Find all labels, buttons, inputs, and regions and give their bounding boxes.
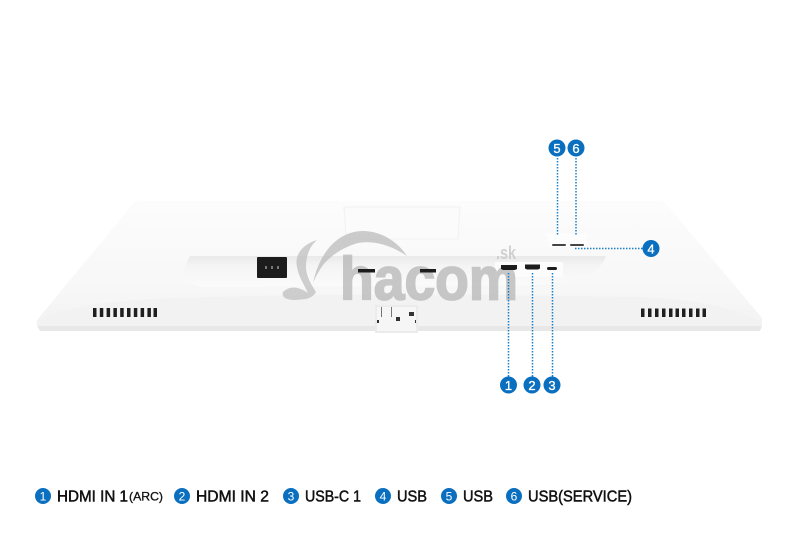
callout 4: 4: [647, 242, 655, 256]
legend item 6: 6: [511, 490, 518, 504]
stand mount recess: [182, 256, 606, 287]
legend item 3: [283, 488, 361, 506]
watermark: hacom.sk: hacom: [340, 246, 518, 312]
legend item 5: [441, 488, 493, 506]
callout 5: 5: [553, 141, 561, 156]
HDMI and USB-C ports: [501, 264, 557, 270]
callout 1: [500, 273, 517, 394]
monitor body: [37, 201, 762, 331]
legend item 1: 1: [40, 490, 47, 504]
power socket: [257, 257, 287, 278]
callout 5: [548, 140, 566, 236]
callout 6: 6: [572, 141, 580, 156]
legend item 4: 4: [380, 490, 387, 504]
callout 6: [568, 140, 584, 236]
legend item 4: USB: [397, 488, 427, 506]
legend item 1: [35, 488, 163, 506]
legend: [35, 488, 632, 506]
callout 4: [575, 240, 660, 257]
callout 2: 2: [528, 378, 536, 393]
legend item 1: HDMI IN 1: [57, 488, 128, 506]
callout 1: 1: [505, 378, 512, 393]
upper USB ports: [552, 244, 584, 246]
callout 2: [524, 273, 540, 394]
legend item 3: USB-C 1: [305, 488, 361, 506]
ports in stand recess: [358, 269, 436, 272]
legend item 1: (ARC): [129, 490, 163, 504]
callout 3: [544, 273, 560, 394]
legend item 4: [375, 488, 427, 506]
upper port panel: [546, 233, 588, 247]
legend item 2: HDMI IN 2: [196, 488, 269, 506]
legend item 5: 5: [446, 490, 453, 504]
bottom connector block: [375, 305, 418, 333]
legend item 3: 3: [288, 490, 295, 504]
vent left: [93, 308, 157, 317]
callout 3: 3: [548, 378, 556, 393]
watermark: hacom.sk: .sk: [496, 243, 517, 263]
vent right: [641, 308, 706, 317]
legend item 6: USB(SERVICE): [528, 488, 632, 506]
watermark: hacom.sk: [283, 231, 518, 312]
legend item 5: USB: [463, 488, 493, 506]
legend item 2: 2: [179, 490, 186, 504]
